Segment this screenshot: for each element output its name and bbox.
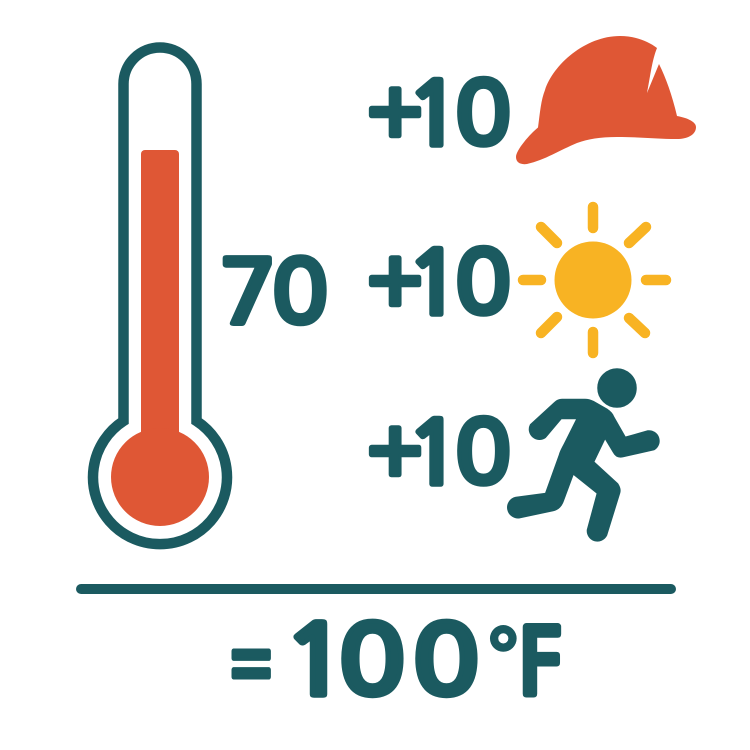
divider line bbox=[81, 584, 671, 594]
label: +10 exertion: 10 bbox=[405, 410, 513, 498]
label: 70 base temperature: 70 bbox=[218, 250, 330, 337]
icon: running person bbox=[508, 370, 658, 540]
label: +10 sun: 10 bbox=[405, 240, 513, 328]
result: = 100°F: F bbox=[518, 618, 562, 709]
label: +10 sun: + bbox=[366, 242, 424, 329]
result: = 100°F: = bbox=[229, 623, 273, 712]
result: = 100°F: ° bbox=[481, 621, 526, 720]
result: = 100°F: 100 bbox=[281, 613, 481, 710]
label: +10 exertion: + bbox=[366, 412, 424, 499]
label: +10 helmet: + bbox=[366, 73, 424, 160]
icon: thermometer bbox=[93, 48, 227, 544]
icon: hard hat bbox=[516, 36, 696, 164]
icon: sun bbox=[523, 207, 666, 353]
label: +10 helmet: 10 bbox=[405, 71, 513, 159]
result: = 100°F bbox=[229, 613, 562, 720]
